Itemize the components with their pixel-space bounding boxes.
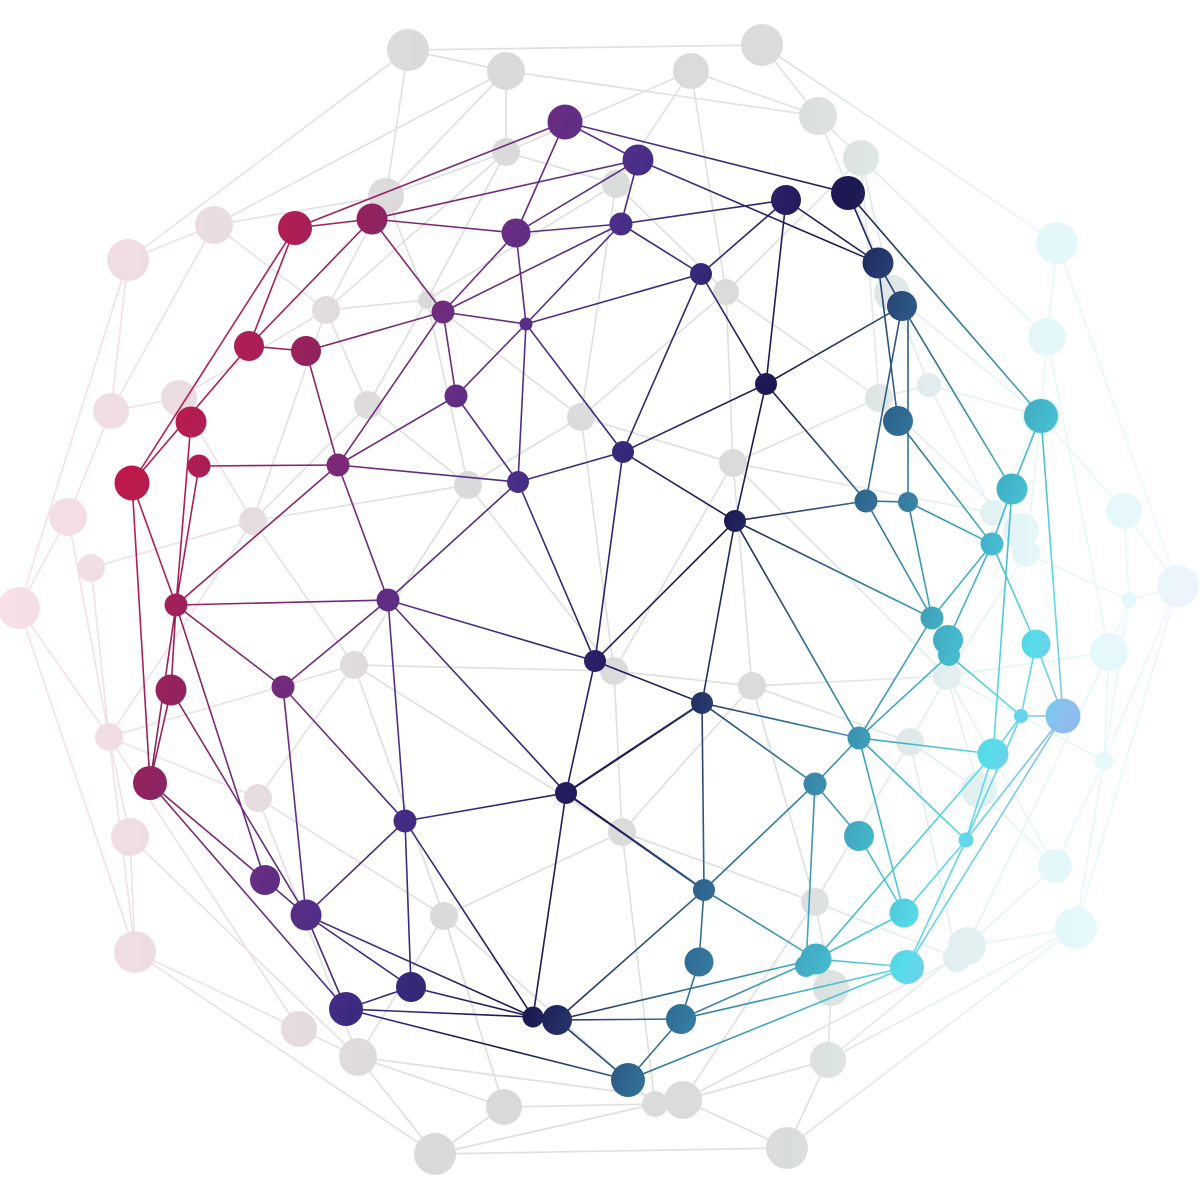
front network edges <box>132 122 1063 1080</box>
front network nodes <box>114 104 1080 1097</box>
thicker central edges <box>566 703 704 890</box>
